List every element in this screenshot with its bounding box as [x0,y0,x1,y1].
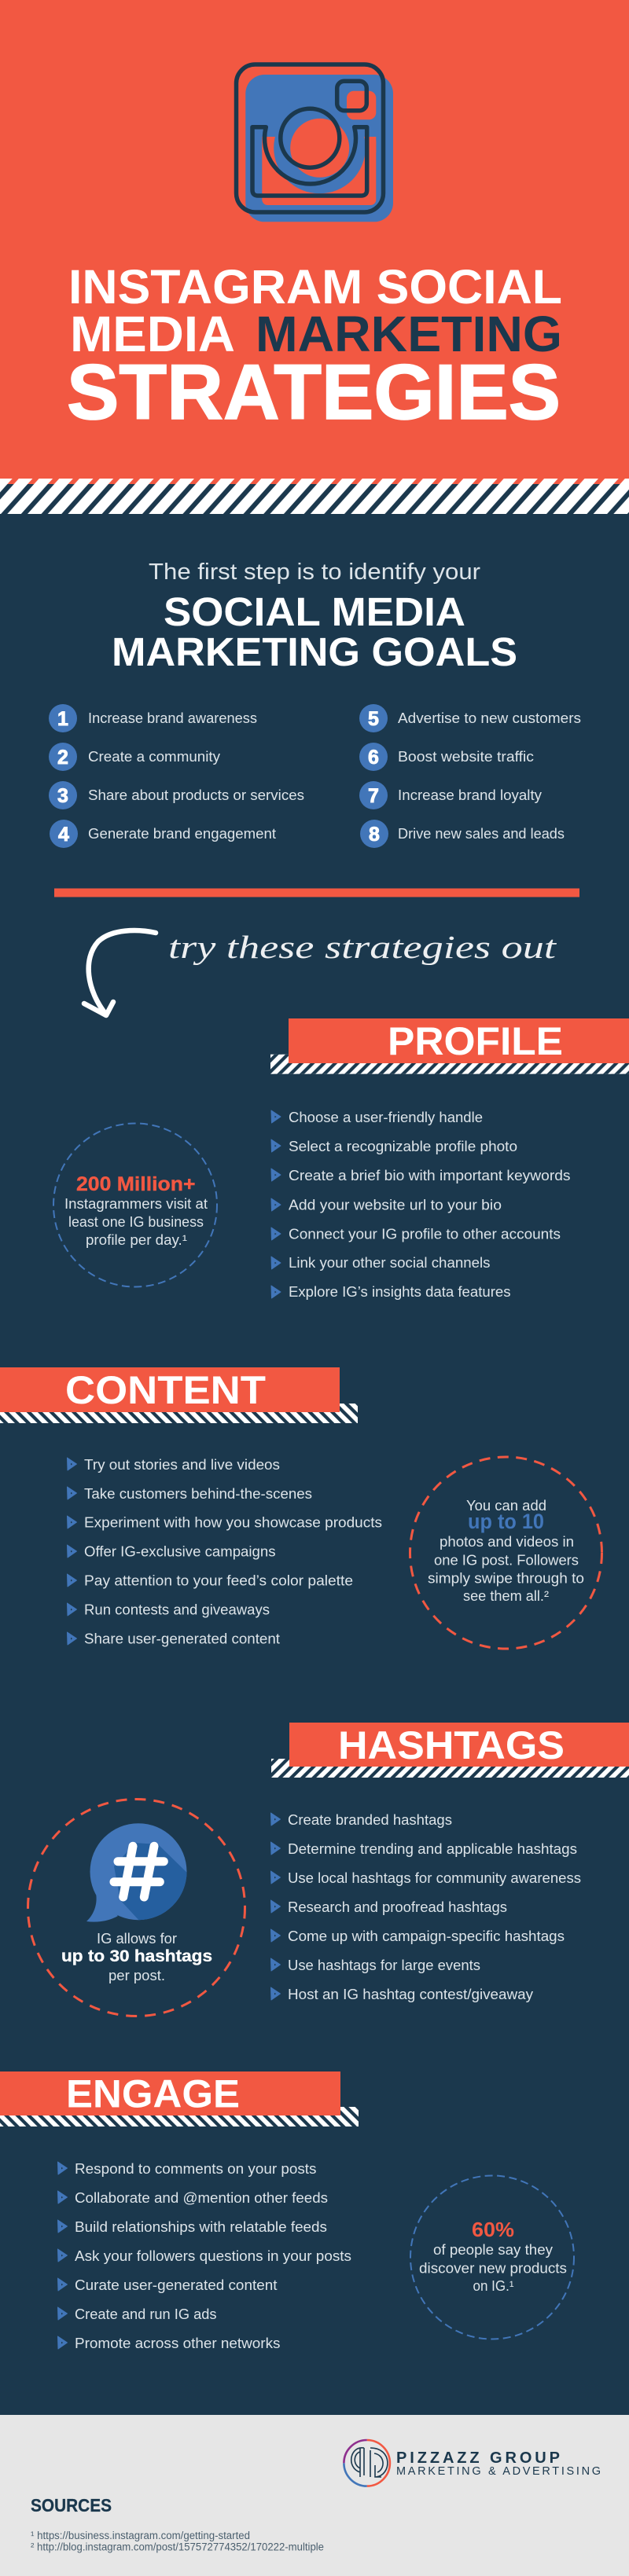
divider bar [54,888,579,897]
callout: 30 hashtags: per post. [109,1968,165,1983]
goal 2: Create a community [88,749,220,765]
list: profile tips: Add your website url to your bio [289,1198,502,1213]
banner: hashtags [271,1723,629,1778]
list: engage tips: Collaborate and @mention other feeds [75,2190,328,2206]
section: content [0,1367,602,1649]
callout: 200 million: 200 Million+ [76,1173,195,1195]
list: hashtag tips [270,1812,581,2002]
heading: sources: SOURCES [31,2495,112,2515]
callout: up to 10 [410,1457,602,1649]
list: engage tips: Build relationships with relatable feeds [75,2219,327,2235]
banner: content: CONTENT [65,1368,266,1412]
goal 6: Boost website traffic [398,749,534,765]
banner: profile: PROFILE [388,1019,563,1063]
list: profile tips: Link your other social channels [289,1255,491,1271]
list: engage tips: Promote across other networks [75,2336,280,2351]
text: source links: ¹ https://business.instagram.com/getting-started [31,2530,250,2541]
goal 8: Drive new sales and leads [398,826,565,842]
list: hashtag tips: Determine trending and applicable hashtags [288,1841,577,1857]
list: content tips: Pay attention to your feed’s color palette [84,1573,353,1589]
icon: curved arrow [84,930,156,1015]
icon: hashtag speech bubble [86,1823,189,1925]
intro line: The first step is to identify your [149,560,480,585]
list: hashtag tips: Research and proofread hashtags [288,1899,507,1915]
list: profile tips: Connect your IG profile to other accounts [289,1226,561,1242]
section: hashtags [28,1723,629,2016]
callout: 30 hashtags: IG allows for [97,1931,177,1947]
callout: up to 10: one IG post. Followers [434,1553,579,1569]
list: engage tips: Curate user-generated content [75,2277,277,2293]
goal 4: 4 [58,824,69,846]
goal 3: 3 [57,785,68,807]
goal 8: 8 [369,824,380,846]
goal 3 [49,781,304,809]
callout: up to 10: photos and videos in [440,1534,574,1550]
goal 5: 5 [368,708,379,730]
goal 7 [359,781,542,809]
list: content tips: Experiment with how you showcase products [84,1515,382,1531]
goal 2 [49,743,220,771]
title: MARKETING [256,306,562,362]
list: profile tips: Choose a user-friendly handle [289,1110,483,1125]
logo: pizzazz group: PIZZAZZ GROUP [396,2449,560,2467]
callout: 60 percent: discover new products [419,2260,567,2276]
panel: orange header [0,0,629,484]
list: hashtag tips: Create branded hashtags [288,1812,452,1828]
list: content tips: Offer IG-exclusive campaigns [84,1543,275,1559]
callout: 200 million: profile per day.¹ [86,1232,187,1248]
banner: hashtags: HASHTAGS [338,1723,565,1767]
callout: up to 10: You can add [466,1498,546,1514]
logo: pizzazz group: MARKETING & ADVERTISING [396,2465,601,2478]
goal 4: Generate brand engagement [88,826,276,842]
goal 7: 7 [368,785,379,807]
callout: 200 million: Instagrammers visit at [64,1196,208,1212]
list: engage tips: Respond to comments on your posts [75,2161,316,2177]
list: profile tips: Select a recognizable profile photo [289,1139,517,1154]
banner: engage [0,2071,359,2126]
panel: social media goals [49,560,581,848]
section: engage [0,2071,574,2351]
list: content tips: Share user-generated content [84,1631,280,1647]
callout: 60 percent: on IG.¹ [473,2278,514,2294]
callout: 200 million [53,1124,217,1287]
goal 4 [50,820,276,848]
diagonal stripe band [0,479,629,514]
list: content tips [68,1457,382,1647]
panel: navy background [0,483,629,2416]
list: hashtag tips: Host an IG hashtag contest/giveaway [288,1987,533,2002]
goal 1 [49,704,257,732]
goal 6: 6 [368,747,379,769]
list: hashtag tips: Use hashtags for large events [288,1958,480,1973]
banner: content [0,1367,358,1423]
icon: instagram camera [236,64,393,222]
goal 8 [360,820,565,848]
list: profile tips [271,1110,571,1300]
goal 1: Increase brand awareness [88,710,257,726]
text: source links [31,2530,324,2552]
heading: goals: MARKETING GOALS [112,629,517,674]
title: STRATEGIES [67,348,561,435]
callout: 60 percent: 60% [472,2218,514,2241]
banner: profile [270,1018,629,1074]
title: INSTAGRAM SOCIAL [68,260,562,314]
goal 6 [359,743,534,771]
banner: engage: ENGAGE [66,2071,240,2115]
heading: goals [112,589,517,674]
callout: 30 hashtags [28,1800,245,2016]
list: content tips: Try out stories and live videos [84,1457,280,1473]
script text: try these strategies out [168,929,557,965]
goal 5 [359,704,581,732]
section: profile [53,1018,629,1300]
callout: 30 hashtags: up to 30 hashtags [61,1947,212,1965]
panel: footer [0,2415,629,2576]
goal 5: Advertise to new customers [398,710,581,726]
callout: up to 10: simply swipe through to [428,1570,584,1586]
callout: 60 percent: of people say they [433,2242,553,2258]
list: profile tips: Create a brief bio with important keywords [289,1168,571,1183]
callout: 60 percent [410,2175,574,2339]
list: engage tips: Ask your followers questions in your posts [75,2248,351,2264]
heading: goals: SOCIAL MEDIA [164,589,465,634]
list: content tips: Take customers behind-the-scenes [84,1486,312,1502]
list: hashtag tips: Come up with campaign-specific hashtags [288,1928,565,1944]
list: engage tips [58,2161,351,2351]
list: profile tips: Explore IG’s insights data features [289,1284,511,1300]
list: engage tips: Create and run IG ads [75,2306,217,2322]
callout: 200 million: least one IG business [68,1214,204,1230]
goal 3: Share about products or services [88,787,304,803]
logo: pizzazz group [344,2440,601,2486]
list: content tips: Run contests and giveaways [84,1602,270,1617]
title: MEDIA [70,306,235,362]
list: hashtag tips: Use local hashtags for community awareness [288,1870,581,1886]
title [67,260,562,435]
text: source links: ² http://blog.instagram.com/post/157572774352/170222-multiple [31,2541,324,2552]
callout: up to 10: see them all.² [463,1588,549,1604]
goal 2: 2 [57,747,68,769]
goal 1: 1 [57,708,68,730]
callout: up to 10: up to 10 [468,1510,544,1533]
goal 7: Increase brand loyalty [398,787,542,803]
